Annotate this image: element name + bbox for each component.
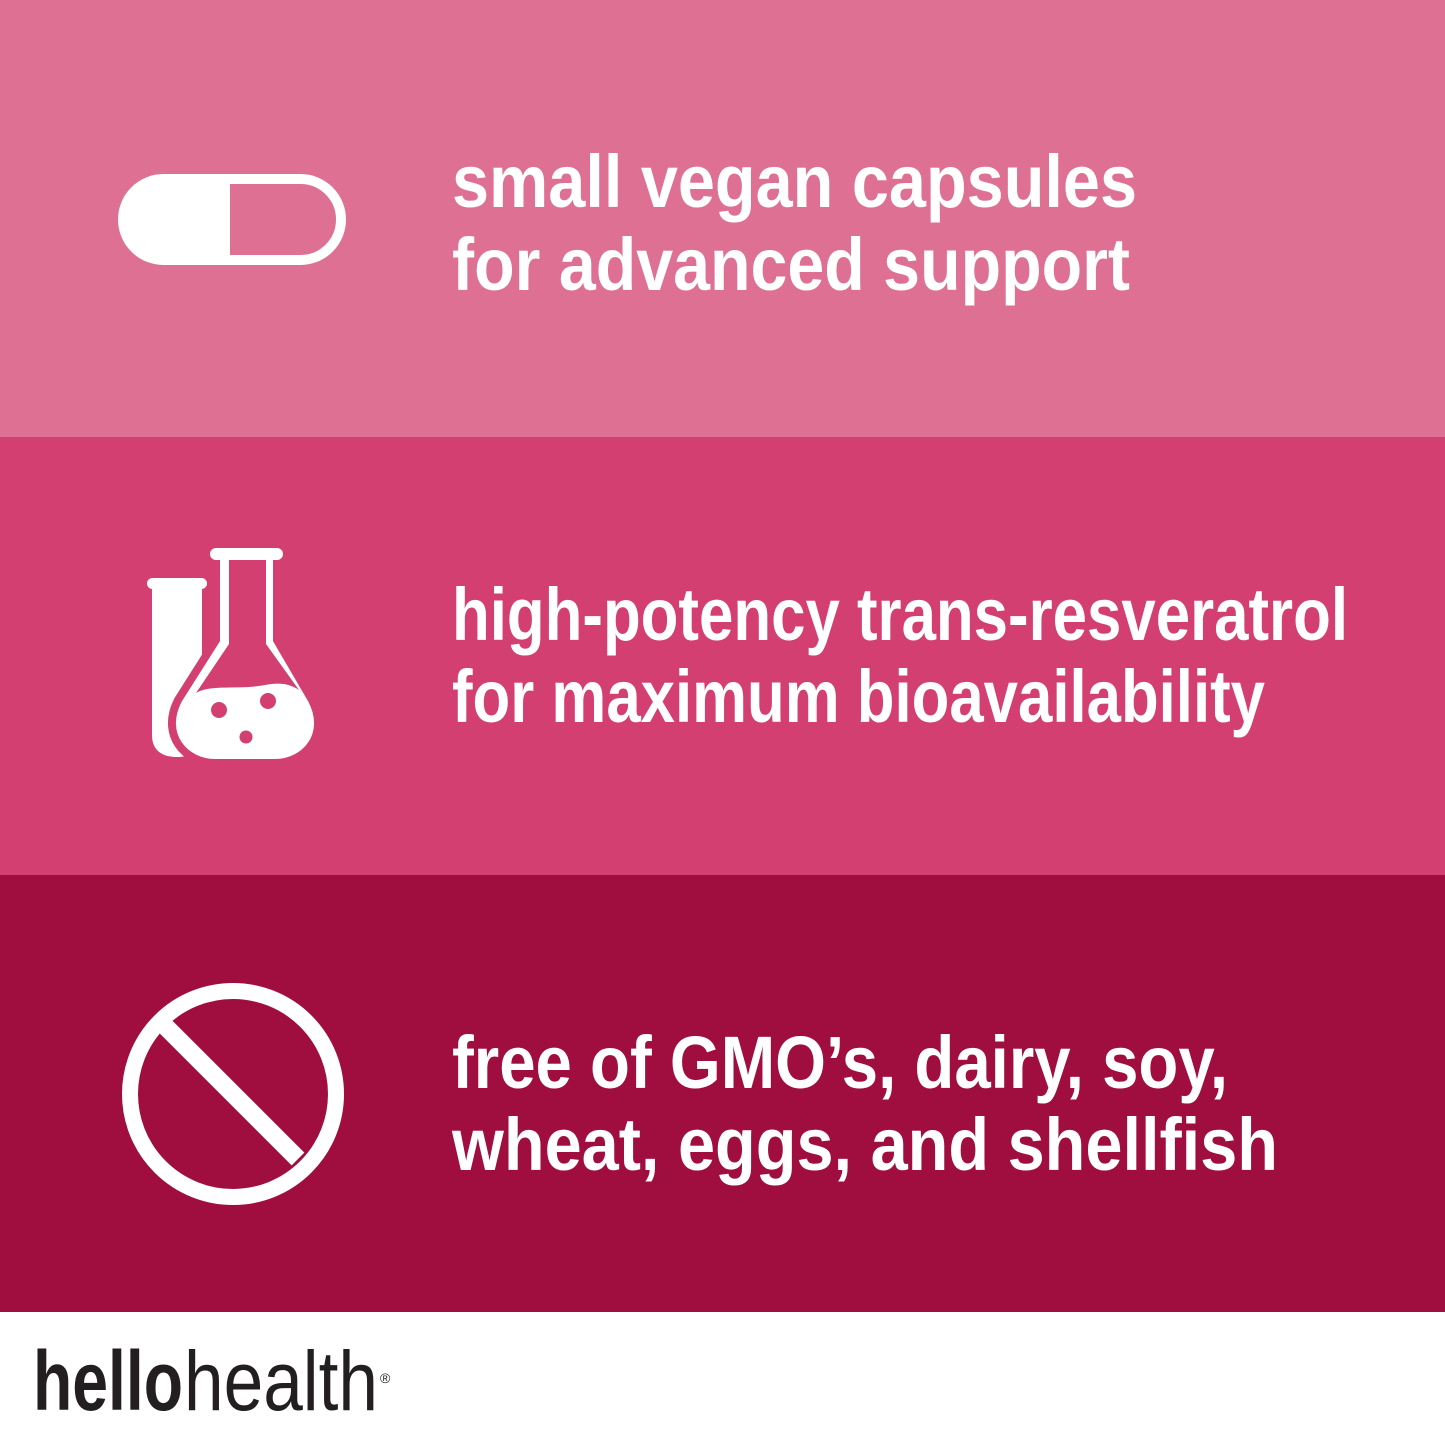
logo: hellohealth: health xyxy=(184,1334,378,1428)
icon: test tube and flask xyxy=(147,548,318,763)
panel: capsules xyxy=(0,0,1445,438)
text: capsules: small vegan capsules xyxy=(452,140,1137,223)
logo: hellohealth: ® xyxy=(380,1370,391,1386)
text: resveratrol xyxy=(452,573,1348,738)
text: allergens: free of GMO’s, dairy, soy, xyxy=(452,1021,1228,1104)
panel: free of allergens xyxy=(0,875,1445,1312)
text: resveratrol: for maximum bioavailability xyxy=(452,655,1265,738)
text: capsules xyxy=(452,140,1137,306)
panel: resveratrol xyxy=(0,437,1445,875)
icon: prohibited sign xyxy=(130,991,336,1197)
logo: hellohealth: hello xyxy=(33,1334,183,1428)
icon: capsule xyxy=(123,179,341,260)
text: allergens: wheat, eggs, and shellfish xyxy=(451,1103,1278,1186)
logo: hellohealth xyxy=(33,1334,391,1428)
text: allergens xyxy=(451,1021,1278,1186)
text: capsules: for advanced support xyxy=(452,223,1130,306)
